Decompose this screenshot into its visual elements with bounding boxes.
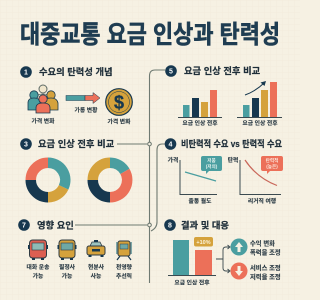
line chart: elastic: (높은)	[266, 163, 278, 169]
line chart: elastic: 리거직 여행	[248, 197, 276, 205]
connector lines	[75, 70, 165, 283]
label: factor 3: 사능	[91, 272, 102, 280]
line chart: elastic: 탄력	[228, 156, 238, 164]
section 4 heading: 비탄력적 수요 vs 탄력적 수요	[181, 138, 282, 149]
section 8 heading	[164, 219, 229, 231]
section 1 heading: 1	[24, 70, 28, 76]
label: factor 1: 가능	[33, 272, 44, 280]
donut chart: after	[93, 163, 127, 197]
section 5 heading: 5	[169, 68, 173, 76]
panel: 8 results and responses	[164, 219, 281, 286]
icon: train	[116, 241, 132, 260]
line chart: inelastic: 가격	[168, 156, 178, 164]
text: service adjustment: 저력을 조정	[250, 272, 281, 281]
icon: taxi	[87, 240, 105, 257]
line chart: inelastic: (저의)	[206, 163, 218, 170]
section 4 heading	[165, 138, 282, 150]
arrow label: 가롱 변황	[75, 106, 98, 114]
section 8 heading: 8	[168, 222, 172, 230]
line chart: inelastic: 출퉁 월도	[189, 197, 212, 205]
section 3 heading	[20, 138, 115, 150]
label: right: 가격 변화	[108, 118, 131, 126]
label: factor 4: 천영량	[116, 265, 132, 271]
line chart: inelastic: 저품	[207, 157, 216, 164]
text: service adjustment: 서비스 조정	[250, 265, 281, 272]
line chart: elastic	[228, 156, 283, 205]
icon: yellow bus	[58, 240, 76, 260]
icon: down arrow circle	[230, 262, 248, 280]
label: factor 2: 필정사	[59, 265, 75, 271]
section 8 heading: 결과 및 대응	[181, 219, 229, 230]
label: left: 가격 변화	[32, 117, 55, 125]
panel: 3 donut comparison	[20, 138, 127, 197]
bar chart: result	[168, 240, 216, 276]
text: revenue change: 수익 변화	[250, 240, 275, 248]
label: before: 요금 인상 전후	[182, 119, 218, 127]
panel: 1 demand elasticity concept	[20, 66, 132, 126]
bar chart: before	[178, 90, 222, 118]
section 1 heading: 수요의 탄력성 개념	[39, 66, 113, 77]
section 7 heading	[18, 219, 74, 231]
callout: +10%: +10%	[196, 240, 211, 246]
arrow: branching to outcomes	[216, 245, 230, 273]
line chart: inelastic	[168, 156, 222, 205]
section 3 heading: 3	[24, 142, 28, 148]
section 7 heading: 영향 요인	[37, 219, 74, 230]
section 4 heading: 4	[169, 142, 173, 148]
label: factor 2: 가능	[62, 272, 73, 280]
icon: dollar coin: $	[114, 92, 124, 112]
panel: 7 influencing factors	[18, 219, 133, 280]
label: factor 4: 추선릭	[116, 272, 132, 280]
icon: group of people	[28, 85, 58, 113]
section 7 heading: 7	[22, 222, 26, 230]
label: factor 1: 대화 운송	[27, 265, 49, 271]
arrow: price change	[66, 92, 100, 104]
panel: 5 fare comparison bars	[165, 65, 282, 127]
line chart: elastic: 탄력적	[266, 157, 278, 164]
bar chart label: 요금 인상 전후	[174, 278, 210, 286]
text: revenue change: 폭력을 조정	[250, 248, 281, 256]
label: after: 요금 인상 전후	[242, 119, 278, 127]
section 3 heading: 요금 인상 전후 비교	[38, 138, 115, 149]
section 5 heading: 요금 인상 전후 비교	[184, 65, 261, 76]
arrow: upward trend	[245, 81, 266, 95]
section 1 heading	[20, 66, 113, 78]
panel: 4 inelastic vs elastic demand	[165, 138, 283, 205]
icon: up arrow circle	[230, 238, 248, 256]
icon: red bus	[28, 240, 48, 260]
section 5 heading	[165, 65, 261, 77]
donut chart: before	[31, 163, 65, 197]
bar chart: after	[237, 82, 282, 118]
label: factor 3: 현분사	[88, 265, 104, 271]
